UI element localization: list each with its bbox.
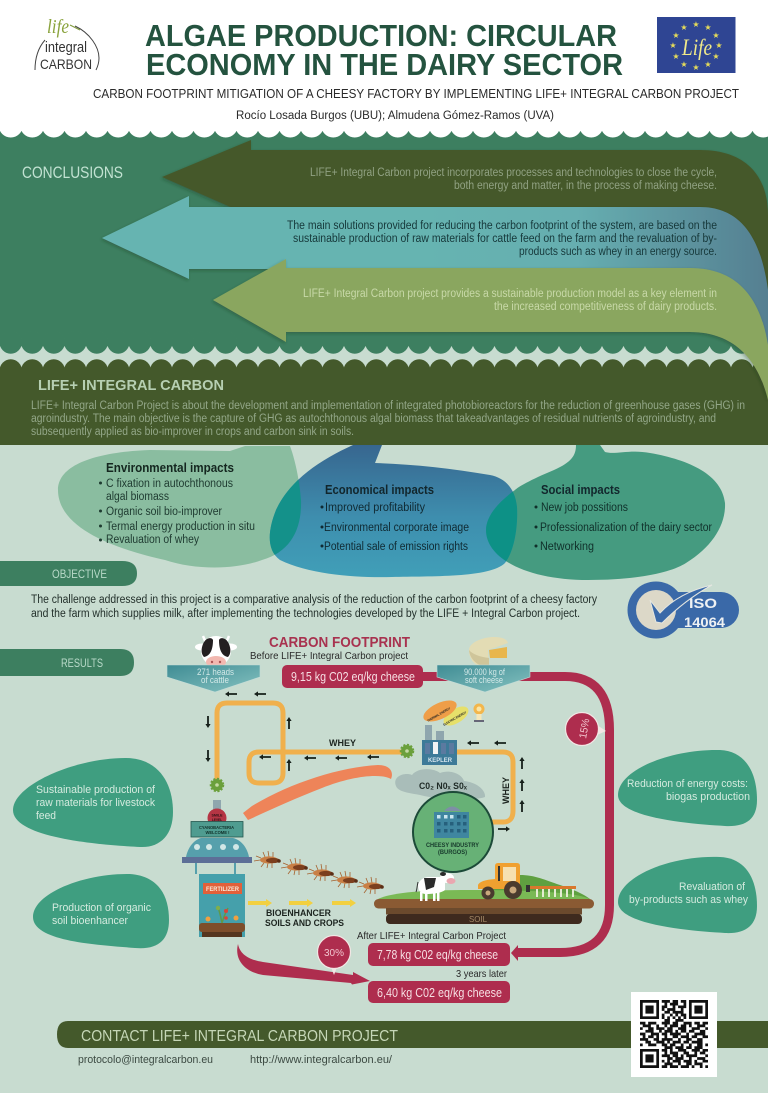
icon: emissions cloud: [395, 769, 485, 800]
label: whey vertical: WHEY: [501, 777, 511, 804]
list: environmental impacts: Organic soil bio-improver: [106, 506, 222, 518]
icon: EU Life flag: Life: [681, 35, 712, 60]
text: project description: [31, 400, 745, 438]
icon: gear left: [211, 779, 223, 791]
text: objective: and the farm which supplies milk, after implementing the technologies developed by the LIFE + Integral Carbon project.: [31, 608, 580, 620]
icon: worms: [254, 851, 384, 894]
text: conclusion 3: the increased competitiveness of dairy products.: [494, 301, 717, 313]
list: environmental impacts: C fixation in autochthonous: [106, 478, 233, 490]
value: three years footprint: [368, 981, 510, 1003]
icon: cheesy industry: CHEESY INDUSTRY: [426, 843, 479, 849]
badge: 30%: 30%: [324, 947, 344, 959]
value: before footprint: [282, 665, 423, 688]
icon: EU Life flag: ★: [712, 52, 720, 61]
heading: environmental impacts: Environmental impacts: [106, 461, 234, 475]
value: before footprint: 9,15 kg C02 eq/kg cheese: [291, 670, 415, 684]
icon: EU Life flag: ★: [680, 60, 688, 69]
list: economical impacts: Improved profitability: [325, 502, 425, 514]
callout: revaluation of by-products: Revaluation of: [679, 881, 746, 893]
icon: EU Life flag: ★: [692, 20, 700, 29]
logo: life integral carbon: integral: [45, 40, 87, 56]
icon: cheese wheel: [469, 637, 508, 668]
icon: cheesy industry: [413, 792, 493, 872]
bubble: environmental impacts: [58, 446, 301, 568]
text: after project: After LIFE+ Integral Carbon Project: [357, 930, 506, 942]
callout: sustainable production: Sustainable production of: [36, 784, 156, 796]
icon: ISO 14064 seal: [628, 582, 739, 638]
banner: cattle: 271 heads: [197, 667, 234, 678]
label: bioenhancer: SOILS AND CROPS: [265, 918, 344, 928]
callout: sustainable production: feed: [36, 810, 56, 822]
banner: soft cheese: 90.000 kg of: [464, 667, 505, 678]
list: environmental impacts: algal biomass: [106, 491, 169, 503]
label: bioenhancer: BIOENHANCER: [266, 908, 331, 918]
pill: objective: [0, 561, 137, 586]
list: economical impacts: [320, 502, 469, 553]
list: environmental impacts: [99, 478, 255, 546]
icon: EU Life flag: ★: [680, 23, 688, 32]
icon: photobioreactor: [182, 800, 252, 874]
callout: energy costs: Reduction of energy costs:: [627, 778, 748, 790]
value: three years footprint: 6,40 kg C02 eq/kg cheese: [377, 986, 502, 1000]
arrow: maroon 30%: [237, 944, 370, 984]
authors: Rocío Losada Burgos (UBU); Almudena Gómez-Ramos (UVA): [236, 110, 554, 122]
text: objective: The challenge addressed in this project is a comparative analysis of the reduction of the carbon footprint of a cheesy factory: [31, 594, 597, 606]
text: conclusion 1: LIFE+ Integral Carbon project incorporates processes and technologies to close the cycle,: [310, 167, 717, 179]
pill: results: RESULTS: [61, 658, 103, 670]
badge: 15%: [566, 712, 606, 746]
arrow: olive conclusion 3: [213, 259, 768, 400]
list: environmental impacts: Termal energy production in situ: [106, 521, 255, 533]
icon: EU Life flag: ★: [692, 63, 700, 72]
icon: kepler factory: [420, 696, 484, 765]
text: conclusion 2: [287, 220, 717, 258]
logo: life integral carbon: [35, 16, 99, 72]
text: social impacts: [534, 483, 712, 553]
diagram: whey pipeline: [205, 691, 525, 832]
bubble: social impacts: [486, 445, 725, 580]
list: economical impacts: Environmental corporate image: [324, 522, 469, 534]
icon: kepler factory: ELECTRIC ENERGY: [442, 710, 468, 727]
callout: sustainable production: raw materials for livestock: [36, 797, 155, 809]
icon: photobioreactor: LEVEL: [212, 818, 223, 822]
label: whey horizontal: WHEY: [329, 738, 356, 748]
badge: 30%: [318, 936, 350, 975]
callout: revaluation of by-products: [618, 857, 757, 933]
text: conclusion 3: LIFE+ Integral Carbon project provides a sustainable production model as a key element in: [303, 288, 717, 300]
callout: organic soil bioenhancer: [33, 874, 169, 948]
list: social impacts: Professionalization of the dairy sector: [540, 522, 712, 534]
text: website: http://www.integralcarbon.eu/: [250, 1054, 393, 1066]
arrows: yellow bioenhancer: [248, 899, 356, 907]
icon: EU Life flag: ★: [704, 60, 712, 69]
icon: EU Life flag: ★: [704, 23, 712, 32]
callout: revaluation of by-products: by-products such as whey: [629, 894, 748, 906]
icon: cheesy industry: (BURGOS): [438, 850, 467, 856]
text: conclusion 2: sustainable production of raw materials for cattle feed on the farm and the revaluation of by-: [293, 233, 717, 245]
title: ECONOMY IN THE DAIRY SECTOR: [146, 47, 623, 82]
banner: cattle: [167, 665, 260, 692]
callout: organic soil bioenhancer: Production of organic: [52, 902, 151, 914]
arrow: dark green conclusion 1: [162, 140, 768, 300]
icon: kepler factory: THERMAL ENERGY: [426, 706, 452, 723]
logo: life integral carbon: life: [47, 16, 69, 38]
icon: fertilizer bag: FERTILIZER: [206, 886, 239, 893]
list: social impacts: [534, 502, 712, 553]
list: economical impacts: Potential sale of emission rights: [324, 541, 468, 553]
text: project description: subsequently applied as bio-improver in crops and carbon sink in soils.: [31, 426, 354, 438]
text: conclusion 2: products such as whey in an energy source.: [519, 246, 717, 258]
value: after footprint: 7,78 kg C02 eq/kg cheese: [377, 948, 498, 962]
title: ALGAE PRODUCTION: CIRCULAR: [145, 18, 617, 53]
banner: soft cheese: soft cheese: [465, 675, 503, 686]
illustration: soil and farm: [374, 863, 594, 924]
text: objective: [31, 594, 597, 620]
text: conclusion 1: both energy and matter, in the process of making cheese.: [454, 180, 717, 192]
flow arrows: [205, 691, 525, 832]
text: conclusion 1: [310, 167, 717, 192]
illustration: soil and farm: SOIL: [469, 914, 487, 924]
icon: EU Life flag: ★: [715, 41, 723, 50]
icon: tractor: [478, 863, 576, 900]
heading: life+ integral carbon: LIFE+ INTEGRAL CARBON: [38, 377, 224, 394]
heading: carbon footprint: CARBON FOOTPRINT: [269, 634, 410, 651]
badge: 15%: 15%: [577, 718, 592, 740]
band: contact: CONTACT LIFE+ INTEGRAL CARBON PROJECT: [81, 1028, 398, 1045]
bubble: economical impacts: [270, 445, 517, 577]
heading: economical impacts: Economical impacts: [325, 483, 434, 497]
text: conclusion 2: The main solutions provided for reducing the carbon footprint of the system, are based on the: [287, 220, 717, 232]
arrow: maroon loop 15%: [420, 676, 610, 961]
pill: objective: OBJECTIVE: [52, 569, 107, 581]
icon: EU Life flag: [657, 17, 736, 73]
icon: fertilizer bag: [199, 874, 245, 937]
banner: soft cheese: [437, 665, 530, 692]
title: [145, 18, 623, 82]
callout: sustainable production: [13, 758, 173, 847]
text: email: protocolo@integralcarbon.eu: [78, 1054, 213, 1066]
icon: gear right: [401, 745, 413, 757]
icon: EU Life flag: ★: [712, 31, 720, 40]
white header background: [0, 0, 768, 130]
icon: cow: [416, 872, 456, 901]
icon: QR code: [631, 992, 717, 1077]
panel: conclusions: [0, 124, 768, 372]
list: social impacts: New job possitions: [541, 502, 628, 514]
icon: EU Life flag: ★: [669, 41, 677, 50]
icon: ISO 14064 seal: 14064: [684, 615, 726, 630]
list: social impacts: Networking: [540, 541, 594, 553]
callout: organic soil bioenhancer: soil bioenhancer: [52, 915, 128, 927]
arrow: teal conclusion 2: [102, 196, 768, 345]
icon: cow head: [195, 636, 237, 668]
logo: life integral carbon: CARBON: [40, 56, 92, 72]
value: after footprint: [368, 943, 510, 966]
icon: emissions cloud: C0₂ N0ₓ S0ₓ: [419, 781, 467, 792]
list: environmental impacts: Revaluation of whey: [106, 534, 199, 546]
text: conclusion 3: [303, 288, 717, 313]
banner: cattle: of cattle: [201, 675, 229, 686]
callout: energy costs: biogas production: [666, 791, 750, 803]
icon: photobioreactor: WELCOME !: [206, 830, 230, 835]
icon: EU Life flag: ★: [672, 31, 680, 40]
icon: kepler factory: KEPLER: [428, 757, 452, 764]
icon: photobioreactor: SMILE: [212, 814, 223, 818]
band: contact: [57, 1021, 768, 1048]
text: three years later: 3 years later: [456, 968, 507, 980]
icon: photobioreactor: CYANOBACTERIA: [199, 825, 235, 830]
icon: EU Life flag: ★: [672, 52, 680, 61]
heading: conclusions: CONCLUSIONS: [22, 164, 123, 182]
text: before project: Before LIFE+ Integral Carbon project: [250, 650, 408, 662]
icon: ISO 14064 seal: ISO: [689, 595, 717, 611]
heading: social impacts: Social impacts: [541, 483, 620, 497]
panel: life+ integral carbon: [0, 358, 768, 445]
arrow: salmon CO2 return: [243, 765, 392, 820]
pill: results: [0, 649, 134, 676]
label: bioenhancer: [265, 908, 344, 928]
callout: energy costs: [618, 750, 757, 826]
